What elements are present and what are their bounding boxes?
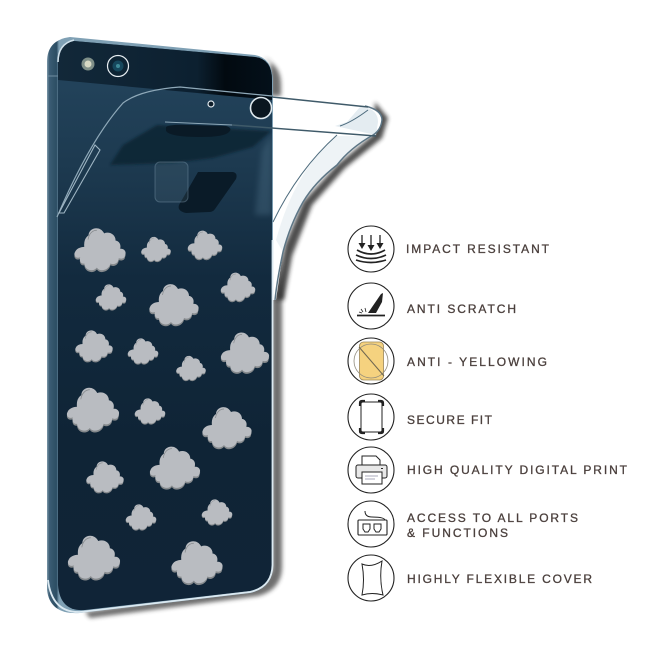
feature: impact resistant [348,226,550,272]
case upper lip lines [232,97,376,136]
cloud [68,536,120,580]
cloud [141,237,171,262]
cloud [126,504,156,531]
label: ANTI SCRATCH [407,302,516,316]
case left curve [57,87,272,217]
phone outer frame [47,37,273,613]
cloud [67,388,119,432]
cloud [188,231,222,260]
label: ACCESS TO ALL PORTS [407,511,578,525]
cloud [176,356,206,381]
feature list [348,226,628,601]
top-left frame highlight [58,40,74,62]
cloud [171,541,223,585]
case fingerprint cutout [155,162,188,202]
icon: printer [348,447,394,493]
phone right and bottom drop shadow [85,58,282,618]
label: SECURE FIT [407,413,493,427]
case flange shadow [276,102,388,300]
label second line: & FUNCTIONS [407,526,508,540]
fingerprint sensor [179,172,237,213]
shadow below case lip [110,125,271,165]
cloud [74,228,126,272]
cloud [150,447,200,490]
icon: flexed cover [348,555,394,601]
icon: blade scratching surface [348,283,394,329]
cloud [135,398,165,425]
label: ANTI - YELLOWING [407,355,547,369]
label: HIGH QUALITY DIGITAL PRINT [407,463,628,477]
feature: secure fit [348,394,493,440]
feature: anti scratch [348,283,516,329]
flash [82,58,94,70]
feature: digital print [348,447,628,493]
cloud [75,330,113,362]
case flash hole [208,101,214,107]
case tinted flange [276,136,373,252]
case side button [59,145,100,213]
clouds pattern [67,228,269,585]
frame seam [47,75,58,77]
icon: impact arrows [348,226,394,272]
case flange clear area [273,96,382,300]
phone with transparent case [47,37,388,618]
feature: ports [348,501,578,547]
icon: phone in bumper case [348,394,394,440]
case outer outline [275,106,382,300]
lighter wedge on right of back [255,134,272,215]
icon: ports [348,501,394,547]
label: HIGHLY FLEXIBLE COVER [407,572,592,586]
label: IMPACT RESISTANT [406,242,550,256]
feature: flexible cover [348,555,592,601]
cloud [96,284,126,311]
icon: yellow case crossed [348,338,394,384]
cloud [202,499,232,526]
feature: anti yellowing [348,338,547,384]
cloud [86,461,124,493]
phone screen back [58,41,272,610]
cloud [221,273,255,302]
rear camera [108,56,128,76]
case inner curve [273,110,368,222]
cloud [202,407,252,449]
phone top camera band [58,41,272,100]
case bottom outline [48,240,272,612]
cloud [149,284,199,326]
case slit [166,125,230,137]
cloud [221,333,269,374]
case flange corner tint [335,107,378,135]
case camera hole [250,98,272,118]
cloud [128,338,158,365]
